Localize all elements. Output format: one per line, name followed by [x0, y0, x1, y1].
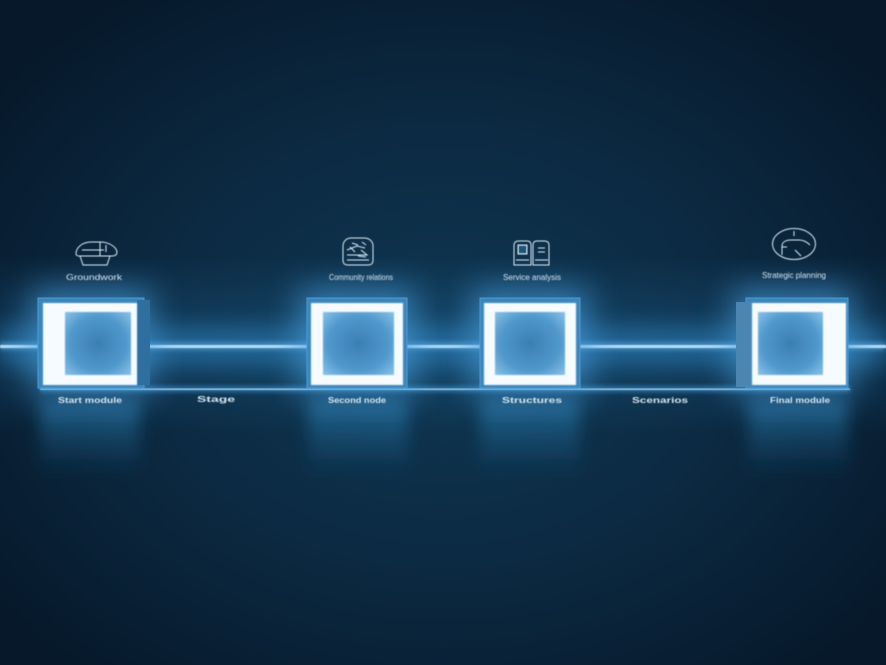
lower baseline [40, 386, 850, 392]
icon: layered panel [343, 238, 373, 265]
icon: open book [514, 241, 549, 265]
box 1 [30, 288, 152, 394]
box 3 [471, 288, 589, 394]
bottom labels [58, 395, 831, 405]
icon: circular gauge [772, 228, 816, 260]
bottom labels: Stage [197, 395, 236, 404]
box 2 [298, 288, 416, 394]
top labels [66, 271, 826, 282]
bottom labels: Structures [502, 396, 563, 405]
bottom labels: Start module [58, 396, 123, 405]
bottom labels: Second node [328, 396, 387, 405]
top labels: Service analysis [503, 273, 561, 282]
top labels: Groundwork [66, 273, 123, 282]
upper connector line [0, 326, 886, 366]
icon: container [76, 242, 117, 265]
reflections [40, 400, 848, 476]
top labels: Community relations [329, 273, 393, 282]
horizontal glow band [0, 255, 886, 435]
top labels: Strategic planning [762, 271, 826, 280]
bottom labels: Final module [770, 396, 831, 405]
box 4 [732, 288, 854, 394]
bottom labels: Scenarios [632, 396, 689, 405]
